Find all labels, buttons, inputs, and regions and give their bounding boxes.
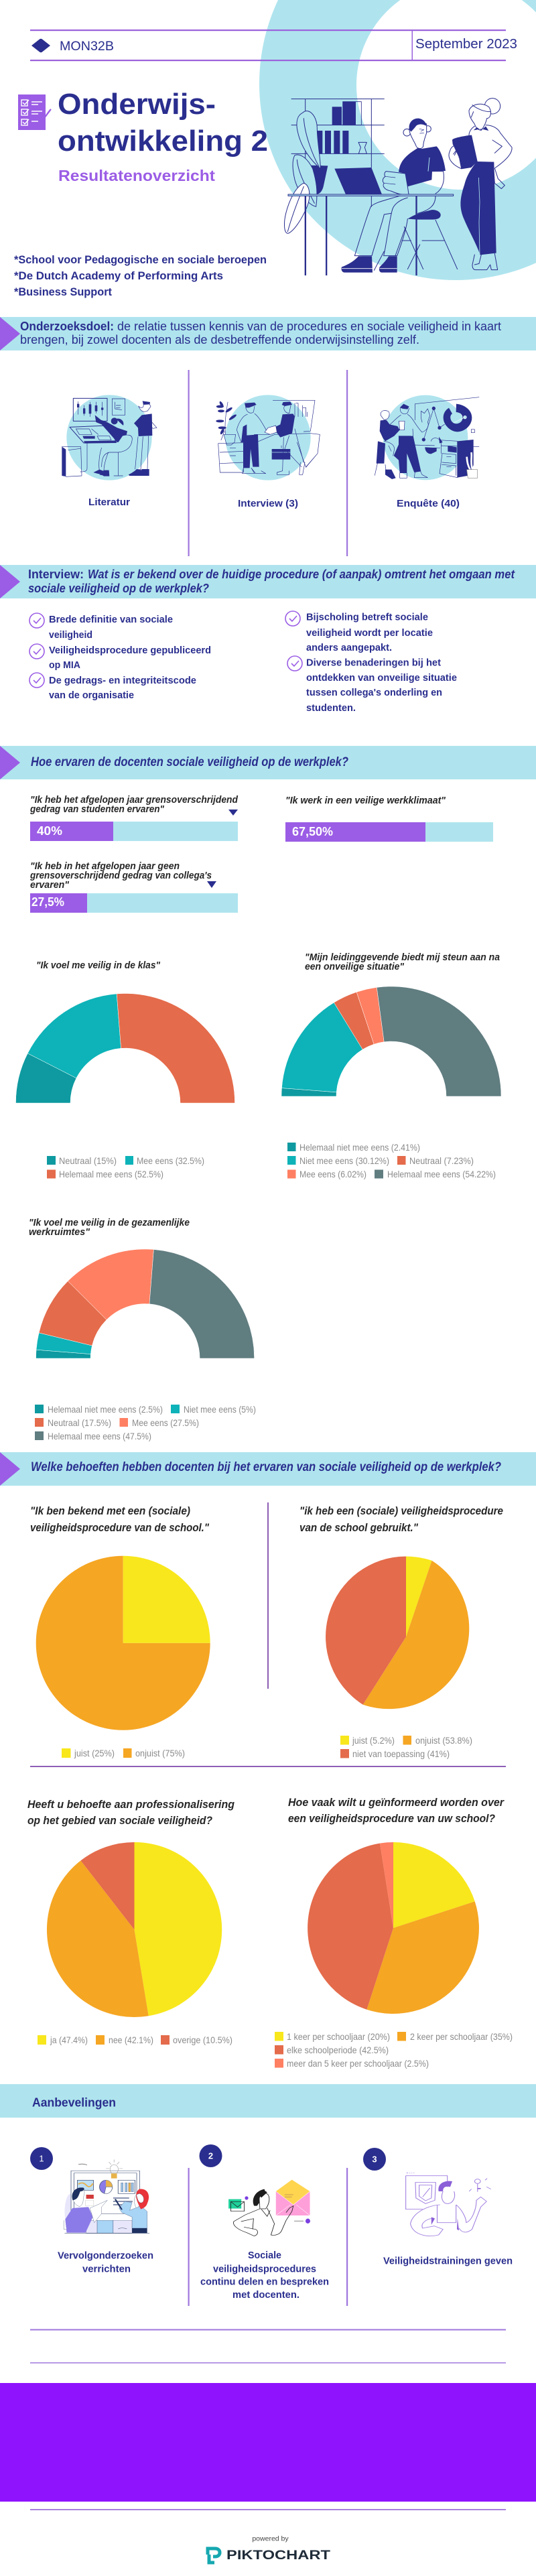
recommendation text: veiligheidsprocedures [213, 2264, 316, 2274]
legend: nee (42.1%) [109, 2035, 153, 2045]
course code: MON32B [60, 39, 114, 54]
recommendation text: Sociale [248, 2250, 281, 2261]
bar [285, 822, 493, 842]
banner: research goal: Onderzoeksdoel: [20, 320, 114, 333]
icon: marker [207, 881, 216, 888]
list: interview findings right [285, 611, 457, 714]
legend: elke schoolperiode (42.5%) [287, 2045, 389, 2055]
banner: research goal [0, 317, 536, 350]
bar [30, 822, 238, 841]
finding: De gedrags- en integriteitscode [49, 675, 196, 686]
recommendation text: verrichten [82, 2264, 131, 2274]
legend: meer dan 5 keer per schooljaar (2.5%) [287, 2058, 429, 2069]
legend: Helemaal mee eens (54.22%) [387, 1169, 496, 1179]
illustration: sharing mail [228, 2180, 310, 2236]
chart: need for professional development: op het gebied van sociale veiligheid? [27, 1814, 213, 1827]
legend: overige (10.5%) [173, 2035, 232, 2045]
banner: recommendations [0, 2084, 536, 2118]
stat: colleague behaviour: grensoverschrijdend gedrag van collega's [29, 870, 212, 881]
legend: Helemaal niet mee eens (2.41%) [299, 1142, 420, 1153]
label: Interview (3) [238, 498, 298, 509]
text block: departments: *De Dutch Academy of Performing Arts [14, 269, 223, 282]
finding continued: op MIA [49, 659, 80, 671]
finding: Brede definitie van sociale [49, 614, 173, 625]
title: Onderwijs- [58, 88, 216, 121]
pie [326, 1556, 469, 1709]
label: Literatur [88, 497, 130, 508]
banner: experience question: Hoe ervaren de docenten sociale veiligheid op de werkplek? [31, 755, 348, 769]
list: interview findings left [29, 613, 211, 701]
icon: marker [228, 810, 238, 816]
half donut [281, 986, 501, 1096]
banner: needs question [0, 1452, 536, 1486]
recommendation text: Veiligheidstrainingen geven [383, 2256, 513, 2266]
legend [340, 1735, 472, 1759]
footer: powered by: powered by [252, 2534, 289, 2542]
chart: how often informed [275, 1796, 513, 2069]
chart: need for professional development [27, 1798, 235, 2045]
chart: familiar with procedure: veiligheidsprocedure van de school." [30, 1522, 209, 1534]
illustration: two colleagues at a desk [284, 99, 512, 275]
chart: familiar with procedure [30, 1505, 210, 1758]
banner: interview question [0, 565, 536, 598]
chart: how often informed: Hoe vaak wilt u geïnformeerd worden over [288, 1796, 505, 1809]
legend: Neutraal (17.5%) [48, 1417, 111, 1428]
panel: methods [62, 370, 479, 556]
number badge 3 [363, 2148, 386, 2171]
legend [47, 1155, 204, 1179]
finding continued: veiligheid wordt per locatie [306, 627, 433, 639]
recommendation text [200, 2250, 329, 2301]
banner: recommendations: Aanbevelingen [32, 2096, 116, 2110]
banner: experience question [0, 746, 536, 779]
finding continued: ontdekken van onveilige situatie [306, 672, 457, 684]
number badge 2: 2 [208, 2151, 213, 2161]
finding continued: van de organisatie [49, 690, 134, 701]
banner: interview question: Interview: [28, 568, 84, 581]
stat: student behaviour: gedrag van studenten ervaren" [29, 803, 165, 815]
number badge 1 [30, 2147, 53, 2170]
stat: safe climate [285, 795, 493, 842]
finding: Veiligheidsprocedure gepubliceerd [49, 645, 211, 656]
illustration: survey [375, 395, 479, 480]
half donut [36, 1249, 255, 1358]
bar [30, 893, 238, 913]
legend: Mee eens (27.5%) [132, 1417, 199, 1428]
chart: how often informed: een veiligheidsprocedure van uw school? [288, 1812, 496, 1825]
icon: check [287, 656, 302, 671]
pie [47, 1842, 222, 2017]
date: September 2023 [415, 37, 517, 52]
stat: student behaviour: "Ik heb het afgelopen jaar grensoverschrijdend [30, 794, 239, 806]
title [58, 88, 268, 157]
text block: departments: *School voor Pedagogische en sociale beroepen [14, 253, 267, 266]
icon: diamond [31, 39, 50, 52]
legend: Niet mee eens (30.12%) [299, 1155, 389, 1166]
panel: recommendations [30, 2144, 513, 2306]
legend: juist (5.2%) [352, 1735, 395, 1746]
number badge 3: 3 [372, 2154, 377, 2165]
chart: safe in shared rooms: werkruimtes" [29, 1226, 90, 1238]
legend: ja (47.4%) [50, 2035, 88, 2045]
legend: Helemaal mee eens (47.5%) [48, 1431, 151, 1441]
legend: Helemaal mee eens (52.5%) [59, 1169, 163, 1179]
icon: check [29, 673, 44, 688]
header bar [30, 29, 517, 61]
chart: used procedure: "ik heb een (sociale) veiligheidsprocedure [299, 1505, 503, 1517]
legend: 1 keer per schooljaar (20%) [287, 2031, 390, 2042]
finding continued: studenten. [306, 702, 356, 714]
legend: Neutraal (7.23%) [409, 1155, 474, 1166]
title: ontwikkeling 2 [58, 125, 268, 157]
chart: support from manager [281, 952, 501, 1179]
logo text: PIKTOCHART [226, 2549, 330, 2563]
legend: Helemaal niet mee eens (2.5%) [48, 1404, 163, 1415]
block: purple banner [0, 2383, 536, 2502]
recommendation text: Vervolgonderzoeken [58, 2250, 153, 2261]
legend: Niet mee eens (5%) [184, 1404, 256, 1415]
number badge 2 [200, 2144, 222, 2167]
icon: checklist [18, 94, 51, 130]
stat: colleague behaviour: "Ik heb in het afgelopen jaar geen [30, 860, 180, 872]
chart: support from manager: "Mijn leidinggevende biedt mij steun aan na [305, 952, 500, 963]
finding: Bijscholing betreft sociale [306, 611, 428, 623]
legend [38, 2035, 232, 2045]
bar: 40% [37, 824, 62, 838]
banner: research goal: de relatie tussen kennis van de procedures en sociale veiligheid in kaart [117, 320, 501, 333]
icon: check [29, 613, 44, 628]
legend: Mee eens (32.5%) [137, 1155, 204, 1166]
banner: research goal: brengen, bij zowel docenten als de desbetreffende onderwijsinstelling zelf. [20, 333, 419, 346]
number badge 1: 1 [39, 2154, 44, 2163]
finding continued: anders aangepakt. [306, 642, 392, 653]
illustration: safety key [406, 2172, 491, 2236]
icon: check [29, 644, 44, 659]
legend: juist (25%) [74, 1748, 115, 1758]
chart: used procedure: van de school gebruikt." [299, 1522, 418, 1534]
recommendation text [58, 2250, 153, 2274]
recommendation text: continu delen en bespreken [200, 2276, 329, 2288]
chart: familiar with procedure: "Ik ben bekend met een (sociale) [30, 1505, 190, 1517]
stat: colleague behaviour: ervaren" [30, 879, 70, 891]
legend: Neutraal (15%) [59, 1155, 117, 1166]
legend [62, 1748, 185, 1758]
chart: safe in classroom: "Ik voel me veilig in de klas" [36, 960, 161, 971]
stat: colleague behaviour [29, 860, 238, 913]
pie [308, 1842, 479, 2014]
legend: onjuist (53.8%) [415, 1735, 472, 1746]
bar: 67,50% [292, 825, 333, 838]
label: Enquête (40) [397, 498, 460, 509]
icon: piktochart logo [208, 2549, 220, 2563]
illustration: research team [64, 2160, 149, 2234]
finding: Diverse benaderingen bij het [306, 657, 441, 669]
pie [36, 1556, 210, 1730]
stat: safe climate: "Ik werk in een veilige werkklimaat" [285, 795, 446, 806]
chart: used procedure [299, 1505, 503, 1759]
legend: onjuist (75%) [135, 1748, 185, 1758]
chart: safe in shared rooms [29, 1217, 256, 1441]
bar: 27,5% [31, 895, 64, 909]
legend: 2 keer per schooljaar (35%) [410, 2031, 513, 2042]
finding continued: veiligheid [49, 629, 92, 641]
illustration: safety key: × □ – [406, 2172, 415, 2175]
text block: departments [14, 253, 267, 298]
finding continued: tussen collega's onderling en [306, 687, 442, 698]
recommendation text: met docenten. [232, 2289, 299, 2301]
banner: interview question: sociale veiligheid op de werkplek? [28, 582, 209, 595]
half donut [16, 993, 234, 1103]
chart: safe in classroom [16, 960, 234, 1179]
chart: support from manager: een onveilige situatie" [305, 961, 405, 972]
legend: Mee eens (6.02%) [299, 1169, 366, 1179]
chart: need for professional development: Heeft u behoefte aan professionalisering [27, 1798, 235, 1811]
footer: powered by [208, 2534, 330, 2563]
stat: student behaviour [29, 794, 239, 841]
illustration: interview [216, 395, 320, 480]
icon: check [285, 611, 300, 626]
divider [267, 1502, 269, 1689]
text block: departments: *Business Support [14, 285, 112, 298]
legend: niet van toepassing (41%) [352, 1748, 450, 1759]
chart: safe in shared rooms: "Ik voel me veilig in de gezamenlijke [29, 1217, 190, 1228]
legend [287, 1142, 496, 1179]
illustration: literature [62, 395, 157, 480]
background ring [259, 0, 536, 280]
legend [35, 1404, 256, 1441]
subtitle: Resultatenoverzicht [58, 167, 215, 184]
legend [275, 2031, 513, 2069]
